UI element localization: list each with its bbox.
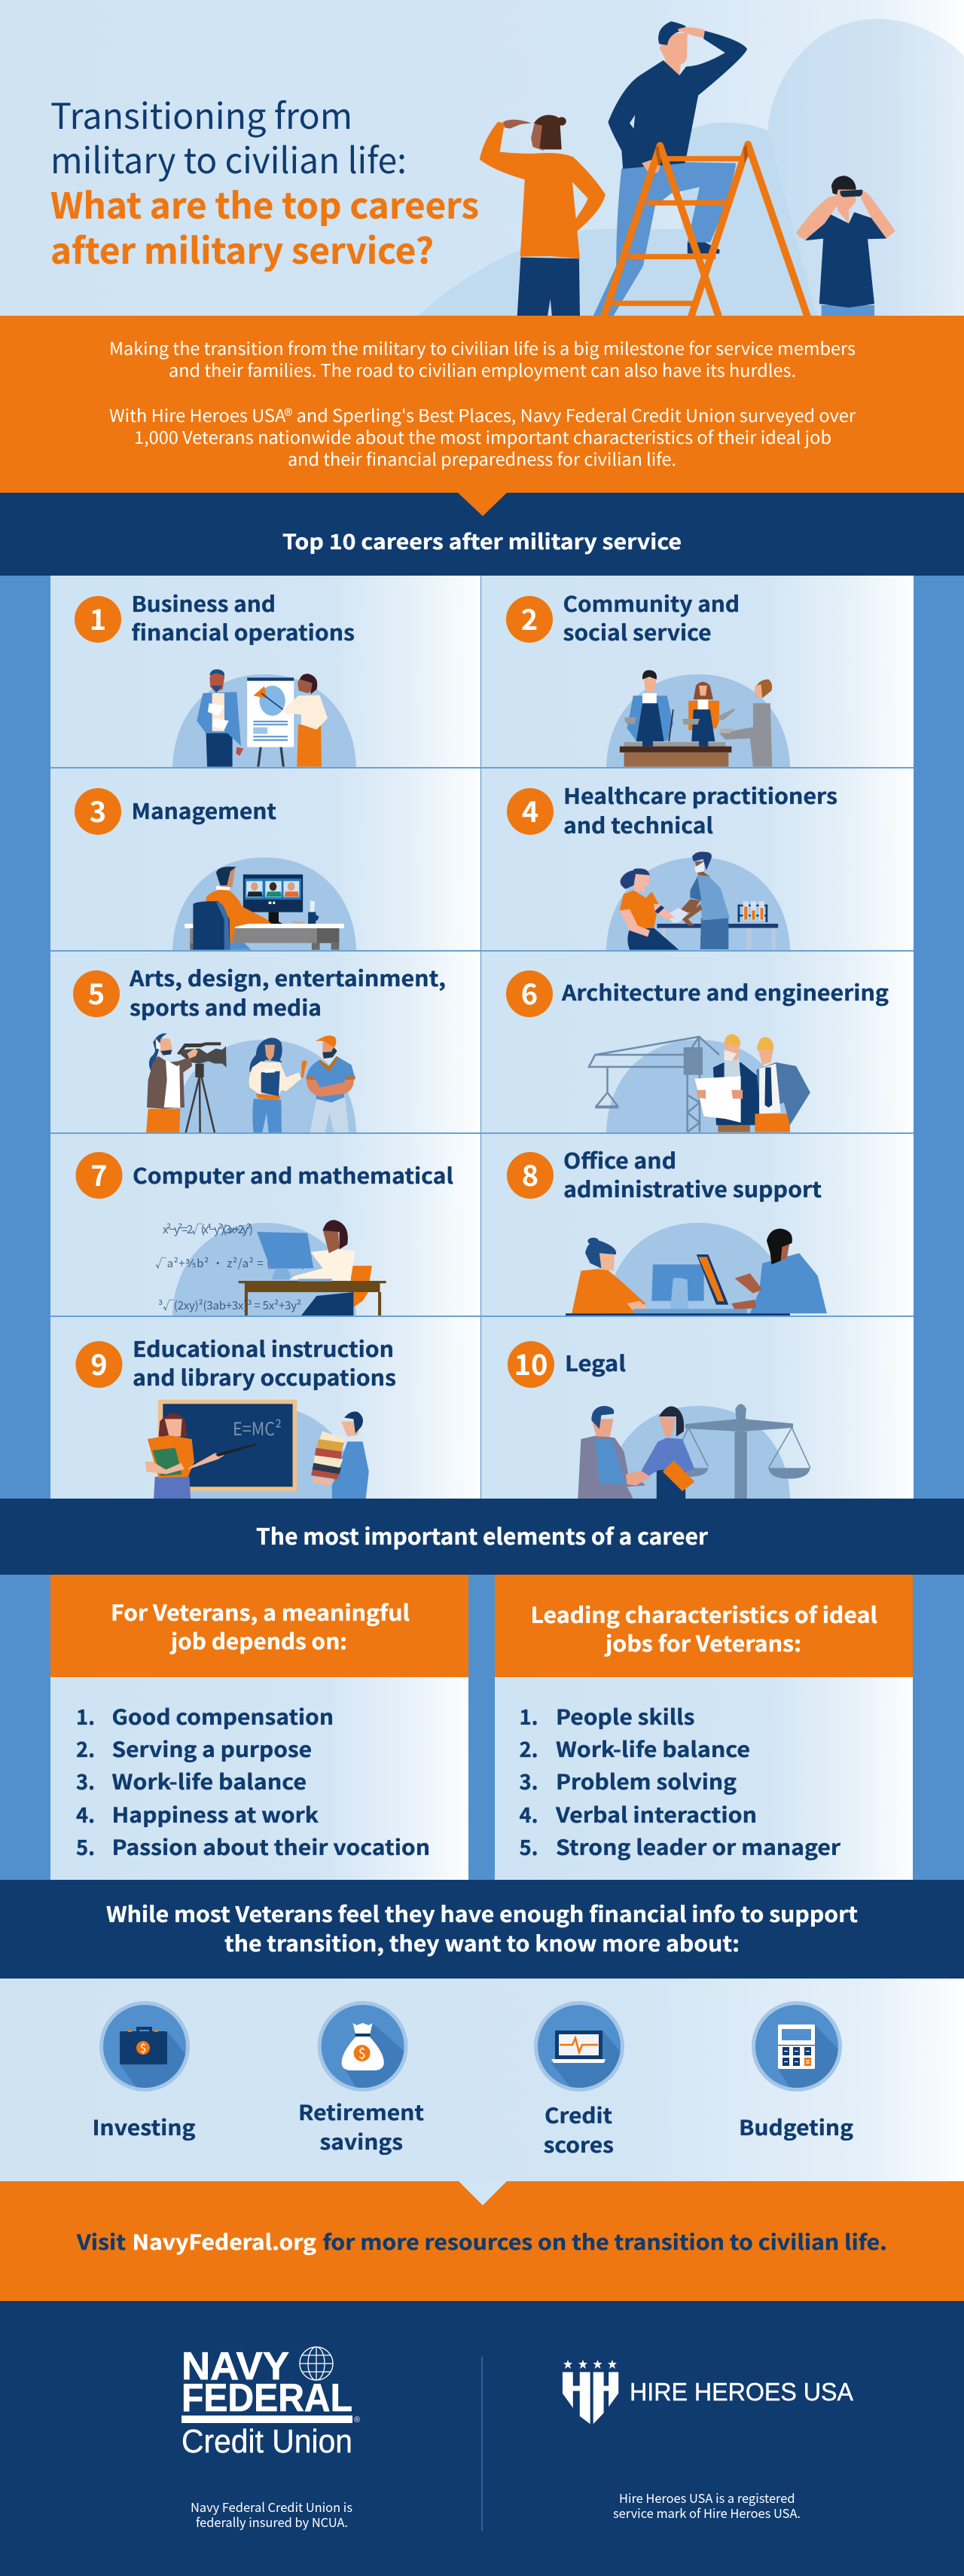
list: meaningful job factors <box>76 1701 430 1862</box>
heading band: most important elements: The most important elements of a career <box>256 1520 708 1551</box>
panel: elements background <box>0 1575 964 1880</box>
panel: meaningful job: job depends on: <box>169 1624 347 1656</box>
career 5: Arts, design, entertainment, <box>129 962 446 993</box>
topic: credit scores <box>534 2001 624 2153</box>
text: service mark note: Hire Heroes USA is a registered <box>619 2489 795 2507</box>
list: ideal job characteristics: Work-life balance <box>556 1734 750 1764</box>
career 1 <box>75 588 356 767</box>
illustration: math formulas: √a²+⅗b² · z²/a² = (a²+b²) <box>155 1255 306 1271</box>
list: ideal job characteristics: 3. <box>520 1766 538 1796</box>
list: meaningful job factors: 2. <box>76 1734 95 1764</box>
logo: Navy Federal Credit Union: ® <box>354 2416 360 2425</box>
heading band: most important elements <box>0 1499 964 1575</box>
icon: briefcase <box>99 2001 190 2092</box>
heading band: top 10 careers: Top 10 careers after military service <box>282 526 682 556</box>
career 8: 8 <box>522 1153 538 1194</box>
panel: intro: and their families. The road to civilian employment can also have its hurdles. <box>169 356 796 382</box>
career 9: 9 <box>90 1342 108 1383</box>
list: ideal job characteristics: 4. <box>520 1799 538 1829</box>
career 7: Computer and mathematical <box>133 1160 453 1190</box>
career 5 <box>73 962 446 1132</box>
career 8 <box>507 1144 827 1316</box>
text on chalkboard: E=MC² <box>233 1414 282 1441</box>
illustration: presenters at flip chart <box>197 669 328 767</box>
career 4 <box>507 780 837 950</box>
logo: Navy Federal Credit Union: FEDERAL <box>182 2376 352 2420</box>
illustration: nurse with patient <box>620 851 778 950</box>
text: NCUA note <box>191 2498 352 2531</box>
career 6: Architecture and engineering <box>561 976 889 1007</box>
logo: Hire Heroes USA <box>563 2360 853 2424</box>
career 10 <box>508 1341 810 1499</box>
panel: intro: With Hire Heroes USA® and Sperling's Best Places, Navy Federal Credit Union surveyed over <box>109 402 856 427</box>
career 1: 1 <box>90 597 106 638</box>
career 1: financial operations <box>131 616 355 647</box>
panel: call to action: NavyFederal.org <box>133 2226 316 2257</box>
icon: money bag <box>318 2001 408 2092</box>
hero illustration: hills and three people looking out <box>418 19 964 316</box>
icon: globe <box>300 2347 333 2380</box>
footer <box>0 2301 964 2576</box>
panel: intro: and their financial preparedness for civilian life. <box>288 445 676 471</box>
panel: call to action: for more resources on the transition to civilian life. <box>322 2226 887 2257</box>
panel: intro: 1,000 Veterans nationwide about the most important characteristics of their ideal job <box>134 423 831 449</box>
career 2: 2 <box>521 597 538 638</box>
illustration: office colleagues at computer <box>566 1229 827 1316</box>
list: ideal job characteristics: Strong leader or manager <box>556 1832 841 1862</box>
icon: calculator <box>752 2001 842 2092</box>
career 2: social service <box>563 616 711 647</box>
title: military to civilian life: <box>50 132 407 184</box>
list: ideal job characteristics: 5. <box>520 1832 538 1862</box>
panel: ideal job characteristics: jobs for Veterans: <box>604 1627 801 1658</box>
topic: credit scores: Credit <box>545 2100 612 2130</box>
illustration: handshake and scales of justice <box>578 1404 810 1499</box>
panel: meaningful job: For Veterans, a meaningful <box>111 1596 410 1627</box>
career 7 <box>75 1152 453 1316</box>
career 5: sports and media <box>130 992 322 1022</box>
list: meaningful job factors: 4. <box>76 1799 95 1829</box>
list: meaningful job factors: Serving a purpose <box>111 1734 312 1764</box>
list: ideal job characteristics: Verbal interaction <box>555 1799 757 1829</box>
topic: investing <box>92 2001 197 2142</box>
man on ladder <box>593 21 747 316</box>
topic: retirement savings: Retirement <box>298 2097 424 2127</box>
topic: investing: Investing <box>92 2112 196 2142</box>
illustration: manager on video call <box>185 866 344 950</box>
list: meaningful job factors: 5. <box>76 1832 95 1862</box>
career 8: administrative support <box>563 1173 822 1204</box>
heading band: top 10 careers <box>0 493 964 576</box>
list: meaningful job factors: Happiness at work <box>111 1799 319 1829</box>
text: service mark note: service mark of Hire Heroes USA. <box>613 2504 801 2522</box>
list: meaningful job factors: 3. <box>76 1766 95 1796</box>
title: Transitioning from <box>50 87 352 139</box>
illustration: math formulas: x²−y² = 2√(x⁴−y²)(3x+2y²) <box>163 1221 253 1237</box>
text: NCUA note: federally insured by NCUA. <box>196 2513 348 2531</box>
text: service mark note <box>613 2489 801 2522</box>
list: ideal job characteristics: Problem solving <box>556 1766 737 1796</box>
heading band: financial info <box>0 1880 964 1979</box>
panel: ideal job characteristics: Leading characteristics of ideal <box>530 1598 877 1630</box>
career 5: 5 <box>88 971 105 1013</box>
list: meaningful job factors: 1. <box>76 1701 95 1731</box>
illustration: crane and engineers <box>589 1034 810 1132</box>
icon: laptop <box>534 2001 624 2092</box>
career 10: 10 <box>514 1342 548 1383</box>
career 4: Healthcare practitioners <box>563 780 837 811</box>
list: ideal job characteristics: 1. <box>520 1701 538 1731</box>
panel: financial topics <box>0 1979 964 2181</box>
list: meaningful job factors: Work-life balance <box>111 1766 307 1796</box>
illustration: serving food at counter <box>620 670 772 767</box>
panel: call to action <box>0 2181 964 2301</box>
topic: retirement savings: savings <box>319 2126 403 2156</box>
title: What are the top careers <box>50 177 479 229</box>
panel: intro <box>0 316 964 493</box>
heading band: financial info: the transition, they want to know more about: <box>224 1927 740 1958</box>
heading band: financial info: While most Veterans feel they have enough financial info to support <box>106 1898 858 1929</box>
ladder <box>604 145 807 316</box>
career 7: 7 <box>90 1153 108 1194</box>
panel: career grid background <box>0 576 964 1499</box>
panel: call to action: Visit <box>76 2226 126 2257</box>
illustration: math formulas <box>155 1221 306 1313</box>
panel: ideal job characteristics <box>495 1575 913 1880</box>
topic: credit scores: scores <box>544 2129 614 2159</box>
list: meaningful job factors: Good compensation <box>111 1701 334 1731</box>
topic: retirement savings <box>298 2001 424 2156</box>
career 6 <box>506 970 889 1132</box>
topic: budgeting <box>739 2001 853 2142</box>
career 6: 6 <box>521 971 538 1013</box>
illustration: teacher and student <box>145 1400 369 1499</box>
hero panel <box>0 0 964 316</box>
illustration: film crew and reporter <box>146 1033 355 1132</box>
logo: Navy Federal Credit Union: NAVY <box>182 2345 289 2388</box>
career 9 <box>75 1333 396 1499</box>
list: ideal job characteristics: People skills <box>556 1701 694 1731</box>
list: meaningful job factors: Passion about their vocation <box>111 1832 430 1862</box>
icon: money bag: $ <box>358 2043 366 2063</box>
career 4: 4 <box>522 789 538 830</box>
panel: intro: Making the transition from the military to civilian life is a big milestone for service members <box>109 335 856 360</box>
icon: briefcase: $ <box>140 2040 146 2056</box>
career 4: and technical <box>563 809 713 840</box>
man with binoculars <box>796 176 895 316</box>
career 8: Office and <box>563 1144 676 1175</box>
topic: budgeting: Budgeting <box>739 2112 853 2142</box>
career 2: Community and <box>563 588 740 619</box>
list: ideal job characteristics <box>520 1701 841 1862</box>
illustration: math formulas: ³√(2xy)²(3ab+3x)³ = 5x²+3y² <box>158 1297 301 1313</box>
career 3: Management <box>131 795 276 826</box>
logo: Navy Federal Credit Union: Credit Union <box>182 2423 352 2460</box>
career 9: and library occupations <box>133 1361 396 1392</box>
career 9: Educational instruction <box>133 1333 394 1364</box>
illustration: mathematician at computer <box>239 1220 386 1316</box>
woman in orange <box>480 115 606 316</box>
panel dividers <box>50 576 914 1499</box>
panel: meaningful job <box>50 1575 468 1880</box>
title <box>50 87 479 274</box>
career 1: Business and <box>131 588 276 619</box>
career 3: 3 <box>90 789 106 830</box>
list: ideal job characteristics: 2. <box>520 1734 538 1764</box>
career 3 <box>75 788 356 950</box>
career 2 <box>506 588 790 767</box>
career 10: Legal <box>565 1347 626 1378</box>
text: NCUA note: Navy Federal Credit Union is <box>191 2498 352 2516</box>
logo: Navy Federal Credit Union <box>182 2345 360 2460</box>
title: after military service? <box>50 222 434 274</box>
logo: Hire Heroes USA: HIRE HEROES USA <box>630 2378 853 2406</box>
